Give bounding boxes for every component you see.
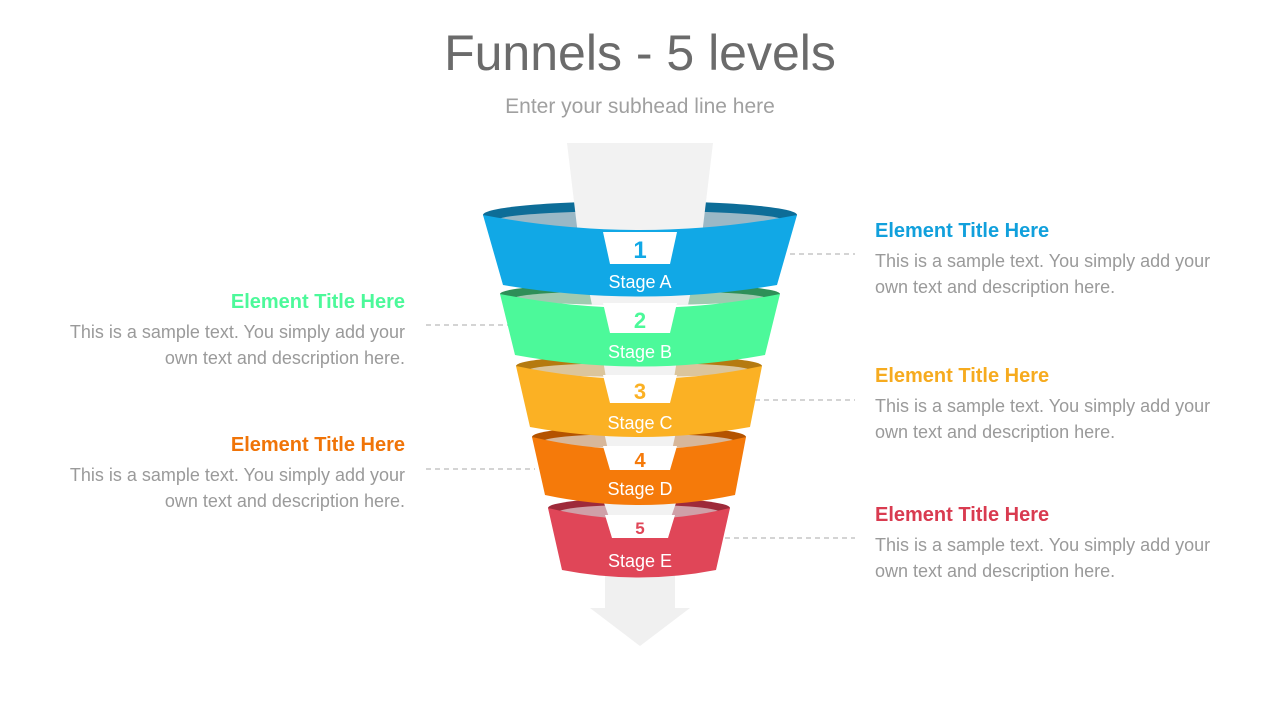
- ring D: [532, 426, 746, 505]
- text: Element Title Here: [875, 365, 1049, 387]
- text: This is a sample text. You simply add your own text and description here.: [70, 465, 405, 511]
- ring E: 5: [635, 519, 645, 538]
- left text 4: [70, 434, 405, 511]
- ring B: 2: [634, 308, 646, 333]
- text: This is a sample text. You simply add your own text and description here.: [875, 251, 1210, 297]
- ring D: Stage D: [607, 479, 673, 499]
- text: This is a sample text. You simply add your own text and description here.: [875, 396, 1210, 442]
- ring B: Stage B: [608, 342, 672, 362]
- subhead: Enter your subhead line here: [505, 95, 775, 118]
- text: Element Title Here: [231, 434, 405, 456]
- title: Funnels - 5 levels: [444, 25, 836, 81]
- text: Element Title Here: [875, 504, 1049, 526]
- ring B: [500, 283, 780, 366]
- right text 3: [875, 365, 1210, 442]
- ring C: 3: [634, 379, 646, 404]
- ring E: Stage E: [608, 551, 672, 571]
- ring D: 4: [634, 450, 646, 472]
- ring A: Stage A: [608, 272, 672, 292]
- ring E: [548, 498, 730, 578]
- left text 2: [70, 291, 405, 368]
- dashed connectors: [426, 254, 855, 538]
- text: Element Title Here: [875, 220, 1049, 242]
- text: Element Title Here: [231, 291, 405, 313]
- ring C: Stage C: [607, 413, 673, 433]
- ring A: 1: [633, 237, 647, 264]
- right text 5: [875, 504, 1210, 581]
- text: This is a sample text. You simply add your own text and description here.: [875, 535, 1210, 581]
- right text 1: [875, 220, 1210, 297]
- ring C: [516, 355, 762, 437]
- bottom arrow: [590, 570, 690, 646]
- text: This is a sample text. You simply add your own text and description here.: [70, 322, 405, 368]
- ring A: [483, 143, 797, 296]
